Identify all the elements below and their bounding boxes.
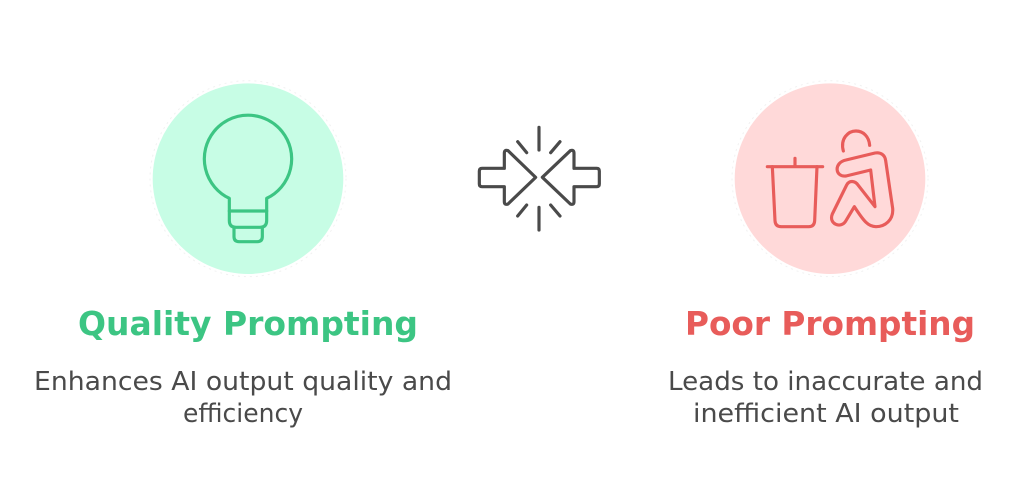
heading: quality prompting: Quality Prompting [78, 304, 418, 343]
text: poor description: Leads to inaccurate and [668, 367, 983, 397]
panel: quality prompting [34, 81, 452, 429]
trash can [767, 158, 823, 227]
icon circle: quality [150, 81, 346, 277]
text: poor description: inefficient AI output [693, 399, 959, 429]
icon: light bulb [204, 115, 292, 242]
icon: converging arrows with burst lines [479, 127, 599, 230]
text: quality description: efficiency [183, 399, 303, 429]
heading: poor prompting: Poor Prompting [685, 304, 975, 343]
text: poor description [668, 367, 983, 429]
person [832, 131, 893, 227]
text: quality description [34, 367, 452, 429]
panel: poor prompting [668, 81, 983, 429]
icon circle: poor [732, 81, 928, 277]
text: quality description: Enhances AI output quality and [34, 367, 452, 397]
icon: person and trash can [767, 131, 893, 227]
